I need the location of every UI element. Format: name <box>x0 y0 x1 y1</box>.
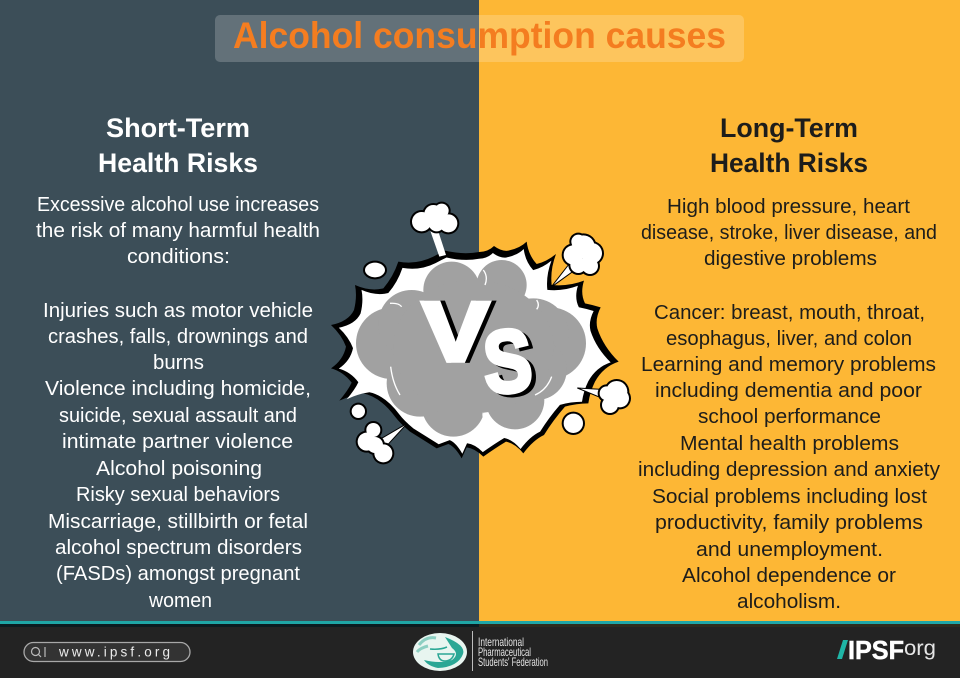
heading: short-term health risks: Short-Term <box>106 113 250 143</box>
VS lettering <box>423 286 540 415</box>
text block: short-term risk list: Miscarriage, stillbirth or fetal <box>48 511 308 533</box>
text block: short-term risk list: Injuries such as motor vehicle <box>43 300 313 322</box>
text block: long-term cardiovascular and digestive: High blood pressure, heart <box>667 196 910 218</box>
icon: VS comic burst <box>331 202 631 464</box>
text block: long-term risk list: and unemployment. <box>696 539 883 561</box>
text block: long-term risk list: Alcohol dependence or <box>682 565 896 587</box>
panel: short-term background <box>0 0 479 622</box>
text block: long-term risk list: Cancer: breast, mouth, throat, <box>654 302 925 324</box>
heading: long-term health risks <box>710 113 868 178</box>
footer bar <box>0 621 960 678</box>
text block: long-term risk list: including dementia and poor <box>655 380 922 402</box>
text block: long-term risk list: alcoholism. <box>737 591 841 613</box>
icon: IPSF logo <box>413 633 467 671</box>
heading: long-term health risks: Health Risks <box>710 148 868 178</box>
VS lettering: V <box>427 286 494 379</box>
text block: short-term risk list: (FASDs) amongst pregnant <box>56 563 300 585</box>
title banner: Alcohol consumption causes <box>233 15 726 56</box>
gray smoke cloud <box>356 260 586 437</box>
organisation name: Pharmaceutical <box>478 645 531 659</box>
text block: short-term risk list: Alcohol poisoning <box>96 458 262 480</box>
text block: short-term risk list: intimate partner violence <box>62 431 293 453</box>
smoke puffs outlines <box>350 202 631 464</box>
text block: short-term intro: the risk of many harmful health <box>36 220 320 242</box>
text block: short-term intro: conditions: <box>127 246 230 268</box>
panel: long-term background <box>479 0 960 622</box>
text block: long-term risk list: school performance <box>698 406 881 428</box>
smoke stems <box>382 228 602 447</box>
heading: short-term health risks <box>98 113 258 178</box>
brand: /IPSForg <box>837 635 936 665</box>
divider line <box>472 631 473 671</box>
text block: long-term cardiovascular and digestive: digestive problems <box>704 248 877 270</box>
text block: long-term cardiovascular and digestive <box>641 196 937 270</box>
text block: short-term intro <box>36 194 320 268</box>
heading: long-term health risks: Long-Term <box>720 113 858 143</box>
brand: /IPSForg: IPSF <box>848 635 904 665</box>
text block: long-term risk list: Mental health problems <box>680 433 899 455</box>
heading: short-term health risks: Health Risks <box>98 148 258 178</box>
VS lettering: S <box>484 313 540 415</box>
VS lettering: V <box>423 286 489 379</box>
organisation name: Students' Federation <box>478 655 548 669</box>
text block: long-term cardiovascular and digestive: disease, stroke, liver disease, and <box>641 222 937 244</box>
text block: long-term risk list: including depression and anxiety <box>638 459 940 481</box>
text block: short-term risk list: women <box>148 590 212 612</box>
text block: long-term risk list <box>638 302 940 613</box>
search pill: website <box>24 642 190 662</box>
smoke puffs fill <box>352 204 629 462</box>
text block: long-term risk list: esophagus, liver, and colon <box>666 328 912 350</box>
text block: long-term risk list: Learning and memory problems <box>641 354 936 376</box>
text block: short-term risk list <box>43 300 313 612</box>
text block: short-term risk list: Violence including homicide, <box>45 378 311 400</box>
burst outline and fill <box>331 242 619 458</box>
text block: short-term risk list: crashes, falls, drownings and <box>48 326 308 348</box>
text block: short-term intro: Excessive alcohol use increases <box>37 194 319 216</box>
text block: long-term risk list: Social problems including lost <box>652 486 927 508</box>
organisation name <box>478 635 548 669</box>
VS lettering: S <box>480 310 535 412</box>
text block: short-term risk list: alcohol spectrum disorders <box>55 537 302 559</box>
icon: magnifier <box>32 647 45 657</box>
text block: long-term risk list: productivity, family problems <box>655 512 923 534</box>
organisation name: International <box>478 635 524 649</box>
brand: /IPSForg: org <box>904 637 936 660</box>
text block: short-term risk list: suicide, sexual assault and <box>59 405 297 427</box>
text block: short-term risk list: burns <box>153 352 204 374</box>
text block: short-term risk list: Risky sexual behaviors <box>76 484 280 506</box>
search pill: website: www.ipsf.org <box>58 644 170 660</box>
